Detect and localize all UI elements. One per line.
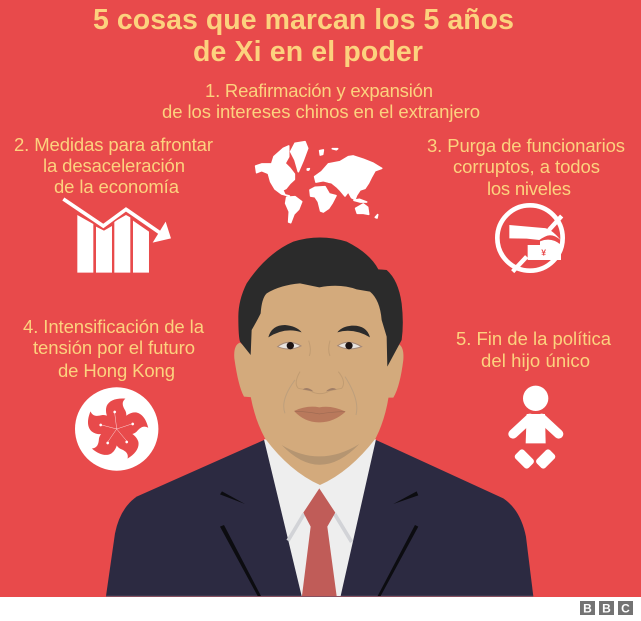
ears	[234, 343, 403, 398]
title: 5 cosas que marcan los 5 años	[93, 4, 514, 36]
text: item 1: 1. Reafirmación y expansión	[205, 80, 433, 101]
text: item 5: 5. Fin de la política	[456, 328, 612, 349]
icon: Hong Kong flag flower	[75, 387, 158, 471]
BBC logo: C	[621, 602, 630, 616]
text: item 2: la desaceleración	[43, 155, 185, 176]
cheek lines	[284, 377, 357, 415]
icon: no corruption	[497, 205, 563, 272]
BBC logo	[580, 601, 633, 616]
text: item 4: de Hong Kong	[58, 360, 175, 381]
suit	[106, 439, 533, 597]
envelope with yen: ¥	[541, 248, 546, 258]
shirt	[264, 439, 376, 596]
title: de Xi en el poder	[193, 36, 423, 68]
collar shadows	[288, 514, 352, 542]
text: item 1	[162, 80, 480, 122]
text: item 4: 4. Intensificación de la	[23, 316, 205, 337]
text: item 3	[427, 135, 625, 199]
text: item 2: de la economía	[54, 176, 180, 197]
icon: world map	[256, 142, 382, 223]
hair	[238, 237, 403, 367]
icon: baby	[513, 386, 559, 470]
BBC logo: B	[583, 602, 592, 616]
text: item 2: 2. Medidas para afrontar	[14, 134, 213, 155]
BBC logo: B	[602, 602, 611, 616]
text: item 3: corruptos, a todos	[453, 156, 600, 177]
title	[93, 4, 514, 68]
text: item 2	[14, 134, 213, 197]
text: item 3: los niveles	[487, 178, 571, 199]
icon: falling chart	[63, 199, 171, 273]
text: item 3: 3. Purga de funcionarios	[427, 135, 625, 156]
text: item 1: de los intereses chinos en el extranjero	[162, 101, 480, 122]
hand	[509, 225, 561, 240]
text: item 4: tensión por el futuro	[33, 337, 195, 358]
eyes	[278, 342, 362, 349]
chin shadow	[282, 444, 359, 465]
text: item 5: del hijo único	[481, 350, 590, 371]
jacket pockets	[220, 491, 418, 596]
tie	[302, 488, 337, 596]
text: item 5	[456, 328, 612, 371]
text: item 4	[23, 316, 205, 381]
mouth	[294, 407, 346, 422]
figure: Xi Jinping portrait	[106, 237, 533, 597]
face and neck	[251, 280, 389, 485]
nose	[296, 341, 344, 394]
eyebrows	[268, 325, 370, 337]
